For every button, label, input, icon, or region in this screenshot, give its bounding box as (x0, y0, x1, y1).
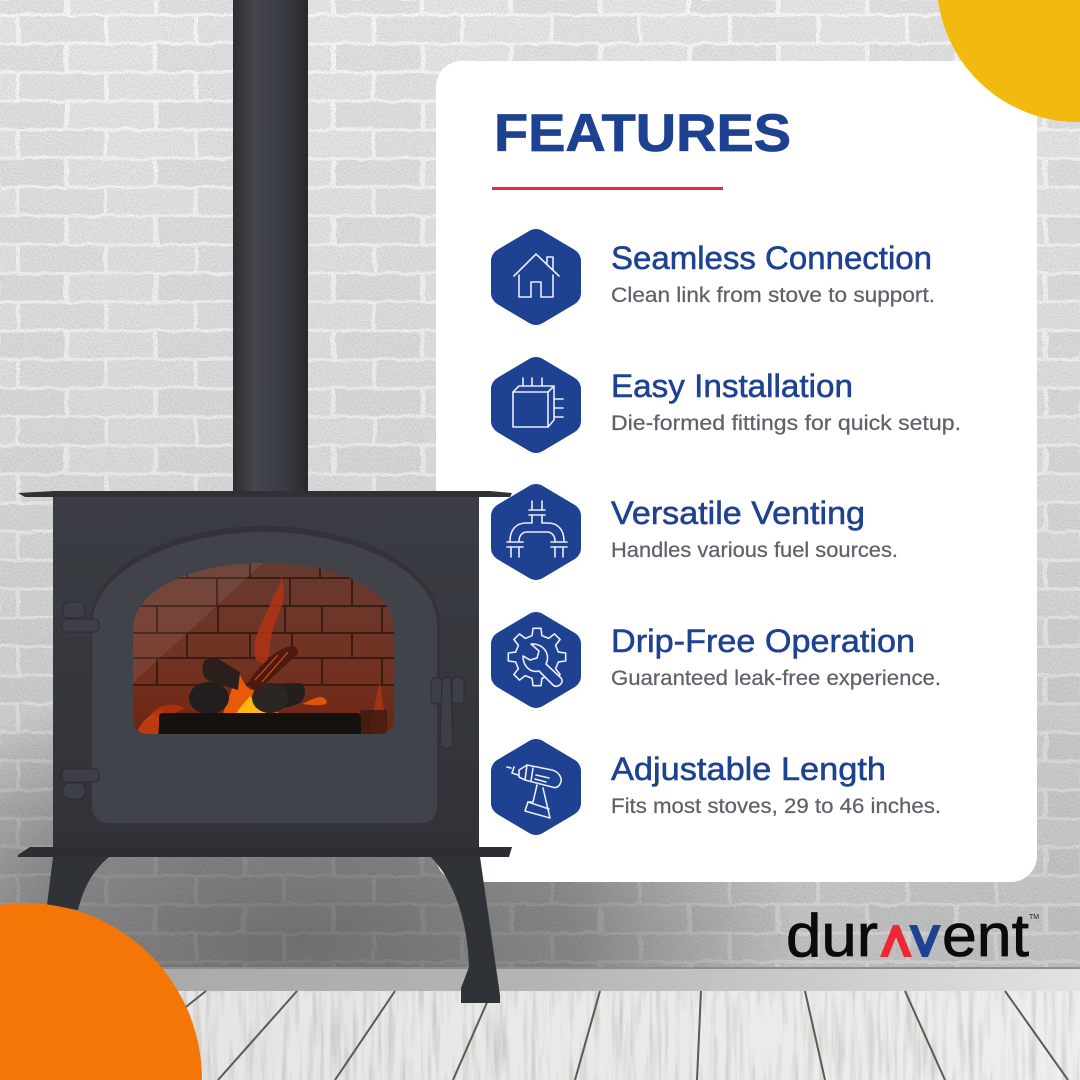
title: Drip-Free Operation (611, 623, 915, 659)
glass reflection (133, 563, 263, 683)
description: Handles various fuel sources. (611, 539, 898, 562)
heading: FEATURES: FEATURES (494, 104, 791, 163)
flue pipe (233, 0, 308, 492)
logo: duravent: ent (942, 902, 1029, 969)
logo: duravent: dur (786, 902, 878, 969)
door hinges (62, 602, 99, 799)
stove body (53, 496, 479, 848)
icon: power drill (504, 752, 568, 822)
feature: Seamless Connection (504, 240, 935, 312)
door handle (431, 677, 464, 748)
description: Guaranteed leak-free experience. (611, 667, 941, 690)
title: Seamless Connection (611, 240, 932, 276)
logo chevron: red (880, 925, 912, 957)
logo: duravent (786, 902, 1039, 969)
title: Easy Installation (611, 368, 853, 404)
flames (136, 575, 388, 734)
description: Die-formed fittings for quick setup. (611, 412, 961, 435)
description: Fits most stoves, 29 to 46 inches. (611, 795, 941, 818)
icon: house (504, 242, 568, 312)
icon: fitting box (504, 370, 568, 440)
feature: Easy Installation (504, 368, 961, 440)
feature: Versatile Venting (504, 495, 898, 567)
door (90, 526, 440, 826)
bottom plate (18, 847, 512, 857)
title: Versatile Venting (611, 495, 865, 531)
top plate (18, 491, 512, 497)
wood stove (18, 0, 512, 1003)
title: Adjustable Length (611, 751, 886, 787)
door window with fire (133, 563, 394, 737)
logs (159, 646, 361, 737)
feature: Drip-Free Operation (504, 623, 941, 695)
decorative corner: orange quarter circle (0, 903, 202, 1080)
logo chevron: blue (909, 925, 941, 957)
logo: duravent: TM (1029, 914, 1039, 921)
description: Clean link from stove to support. (611, 284, 935, 307)
icon: pipes (504, 497, 568, 567)
feature: Adjustable Length (504, 751, 941, 822)
panel: features card (436, 61, 1037, 882)
wooden floor planks (0, 991, 1080, 1080)
icon: gear and wrench (504, 625, 568, 695)
baseboard (0, 967, 1080, 991)
heading underline (492, 187, 723, 190)
decorative corner: yellow quarter circle (938, 0, 1080, 122)
stove legs (47, 857, 500, 1003)
